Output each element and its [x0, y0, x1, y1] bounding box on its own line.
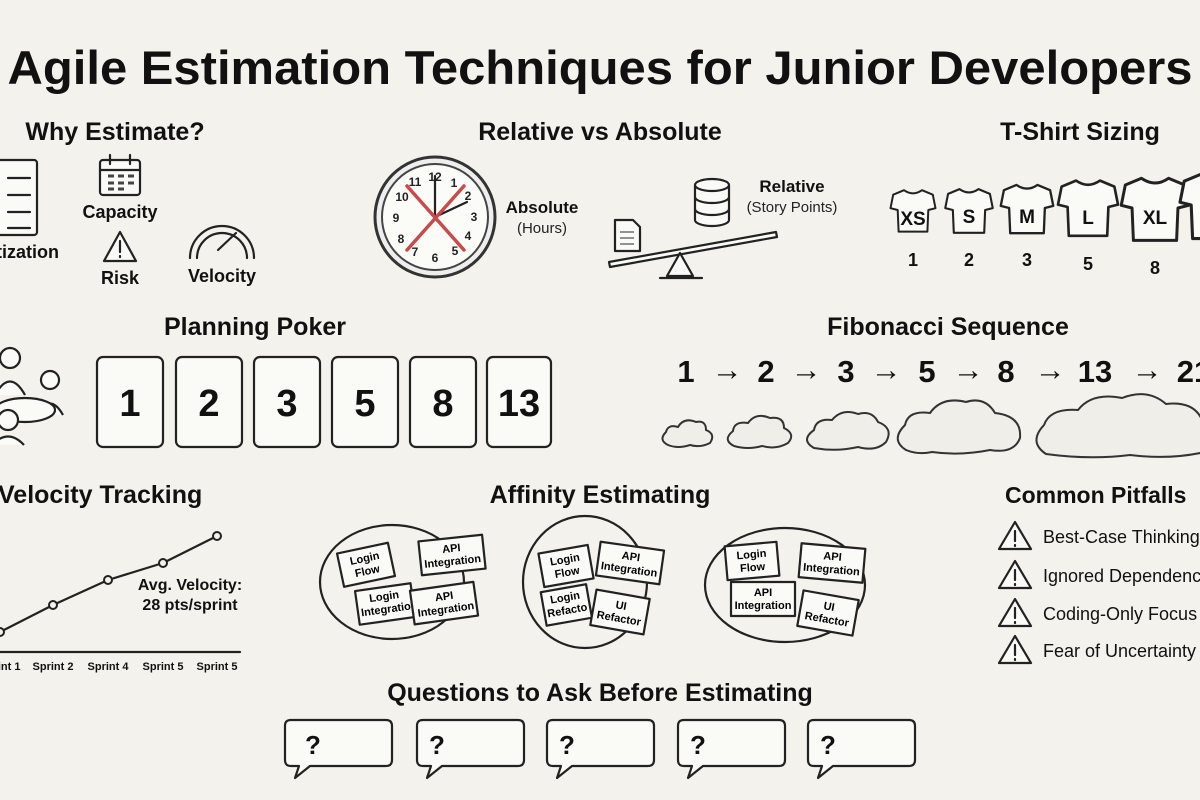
shirts	[890, 174, 1200, 240]
icon: gauge	[190, 226, 254, 258]
cards: 8	[432, 383, 454, 425]
label: absolute hours: (Hours)	[517, 220, 567, 237]
group 2: Flow	[554, 565, 581, 581]
group 3: API	[823, 550, 842, 564]
group 1: Integratio	[360, 600, 412, 619]
icon: crossed clock: 12	[428, 170, 442, 184]
group 1: Flow	[354, 563, 381, 580]
pitfall items	[999, 522, 1200, 663]
size points: 1	[908, 250, 918, 270]
line chart: Sprint 4	[88, 661, 129, 673]
size points: 5	[1083, 254, 1093, 274]
label: relative story points: Relative	[759, 177, 825, 196]
panel: affinity estimating	[320, 481, 865, 648]
label: absolute hours	[506, 198, 578, 237]
shirts: XL	[1143, 208, 1168, 229]
group 1: API	[434, 590, 454, 604]
heading: planning poker: Planning Poker	[164, 313, 346, 341]
icon: crossed clock: 9	[393, 211, 400, 225]
group 3: Login	[736, 548, 767, 562]
label: velocity: Velocity	[188, 266, 256, 286]
icon: crossed clock: 4	[465, 229, 472, 243]
shirts: L	[1082, 208, 1094, 229]
panel: t-shirt sizing	[890, 118, 1200, 278]
group 3: API	[754, 587, 772, 599]
group 1	[320, 525, 486, 639]
sequence	[677, 352, 1200, 389]
label: relative story points	[747, 177, 837, 216]
icon: document	[615, 220, 640, 251]
icon: database	[695, 179, 729, 226]
group 2: Refactor	[596, 609, 643, 629]
panel: fibonacci	[662, 313, 1200, 457]
cards	[97, 357, 551, 447]
icon: crossed clock: 10	[395, 190, 409, 204]
group 3	[705, 528, 865, 642]
heading: affinity estimating: Affinity Estimating	[490, 481, 710, 509]
heading: velocity tracking: Velocity Tracking	[0, 481, 202, 509]
heading: t-shirt sizing: T-Shirt Sizing	[1000, 118, 1160, 146]
label: risk: Risk	[101, 268, 140, 288]
size points: 2	[964, 250, 974, 270]
line chart: Sprint 5	[143, 661, 183, 673]
size points: 3	[1022, 250, 1032, 270]
pitfall items: Best-Case Thinking	[1043, 527, 1200, 547]
panel: velocity tracking	[0, 481, 242, 673]
size points: 8	[1150, 258, 1160, 278]
cards: 13	[498, 383, 540, 425]
group 1: API	[442, 542, 461, 556]
shirts: S	[963, 207, 975, 228]
line chart: Sprint 5	[197, 661, 237, 673]
heading: common pitfalls: Common Pitfalls	[1005, 482, 1186, 508]
panel: questions	[285, 679, 915, 778]
icon: checklist	[0, 160, 37, 235]
icon: crossed clock: 3	[471, 210, 478, 224]
sequence: 8	[997, 354, 1015, 389]
icon: crossed clock: 7	[412, 245, 419, 259]
panel: planning poker	[0, 313, 551, 447]
label: capacity: Capacity	[82, 202, 158, 222]
panel: why estimate	[0, 118, 256, 288]
shirts: XS	[900, 209, 926, 230]
size points	[908, 250, 1160, 278]
icon: crossed clock	[375, 157, 495, 277]
speech bubbles: ?	[305, 730, 321, 760]
group 1: Login	[349, 550, 381, 568]
sequence: →	[870, 352, 902, 387]
group 3: Integration	[803, 562, 860, 578]
icon: crossed clock: 6	[432, 251, 439, 265]
group 2: UI	[615, 599, 628, 613]
pitfall items: Coding-Only Focus	[1043, 604, 1197, 624]
title: Agile Estimation Techniques for Junior Developers	[8, 41, 1192, 94]
sequence: 5	[918, 354, 936, 389]
sequence: 2	[757, 354, 775, 389]
icon: crossed clock: 1	[451, 176, 458, 190]
group 2: API	[621, 550, 641, 564]
cards: 5	[354, 383, 376, 425]
icon: crossed clock: 11	[409, 175, 422, 189]
heading: fibonacci: Fibonacci Sequence	[827, 313, 1069, 341]
group 2: Refacto	[546, 601, 589, 620]
group 1: Integration	[417, 600, 475, 620]
sequence: →	[1034, 352, 1066, 387]
callout: average velocity: Avg. Velocity:	[138, 577, 242, 594]
clouds	[662, 394, 1200, 457]
group 1: Integration	[424, 553, 482, 571]
callout: average velocity	[138, 577, 242, 614]
line chart	[0, 532, 240, 673]
pitfall items: Fear of Uncertainty	[1043, 641, 1196, 661]
sequence: →	[1132, 352, 1162, 387]
sequence: →	[790, 352, 822, 387]
heading: questions: Questions to Ask Before Estimating	[387, 679, 813, 707]
icon: crossed clock: 5	[452, 244, 459, 258]
group 2: Login	[549, 590, 581, 607]
group 2: Login	[549, 552, 581, 569]
speech bubbles: ?	[820, 730, 836, 760]
line chart: Sprint 2	[33, 661, 73, 673]
group 3: Refactor	[804, 610, 851, 630]
icon: team at table	[0, 348, 63, 445]
panel: relative vs absolute	[375, 118, 837, 278]
heading: relative vs absolute: Relative vs Absolute	[478, 118, 722, 146]
sequence: 3	[837, 354, 855, 389]
label: relative story points: (Story Points)	[747, 199, 837, 216]
label: absolute hours: Absolute	[506, 198, 578, 217]
group 2: Integration	[600, 560, 658, 580]
icon: crossed clock: 8	[398, 232, 405, 246]
group 1: Login	[369, 589, 400, 605]
group 2	[523, 516, 664, 648]
icon: seesaw	[609, 232, 777, 278]
speech bubbles: ?	[429, 730, 445, 760]
cards: 1	[119, 383, 141, 425]
panel: common pitfalls	[999, 482, 1200, 663]
group 3: UI	[823, 600, 836, 614]
cards: 2	[198, 383, 220, 425]
group 3: Flow	[740, 561, 766, 575]
speech bubbles: ?	[690, 730, 706, 760]
speech bubbles	[285, 720, 915, 778]
speech bubbles: ?	[559, 730, 575, 760]
sequence: →	[952, 352, 984, 387]
group 3: Integration	[735, 600, 792, 612]
icon: calendar	[100, 155, 140, 195]
sequence: 1	[677, 354, 695, 389]
icon: crossed clock: 2	[465, 189, 472, 203]
heading: why estimate: Why Estimate?	[25, 118, 205, 146]
callout: average velocity: 28 pts/sprint	[142, 597, 238, 614]
shirts: M	[1019, 207, 1035, 228]
icon: risk warning	[104, 232, 136, 261]
sequence: 13	[1078, 354, 1112, 389]
sequence: →	[712, 352, 742, 387]
cards: 3	[276, 383, 298, 425]
